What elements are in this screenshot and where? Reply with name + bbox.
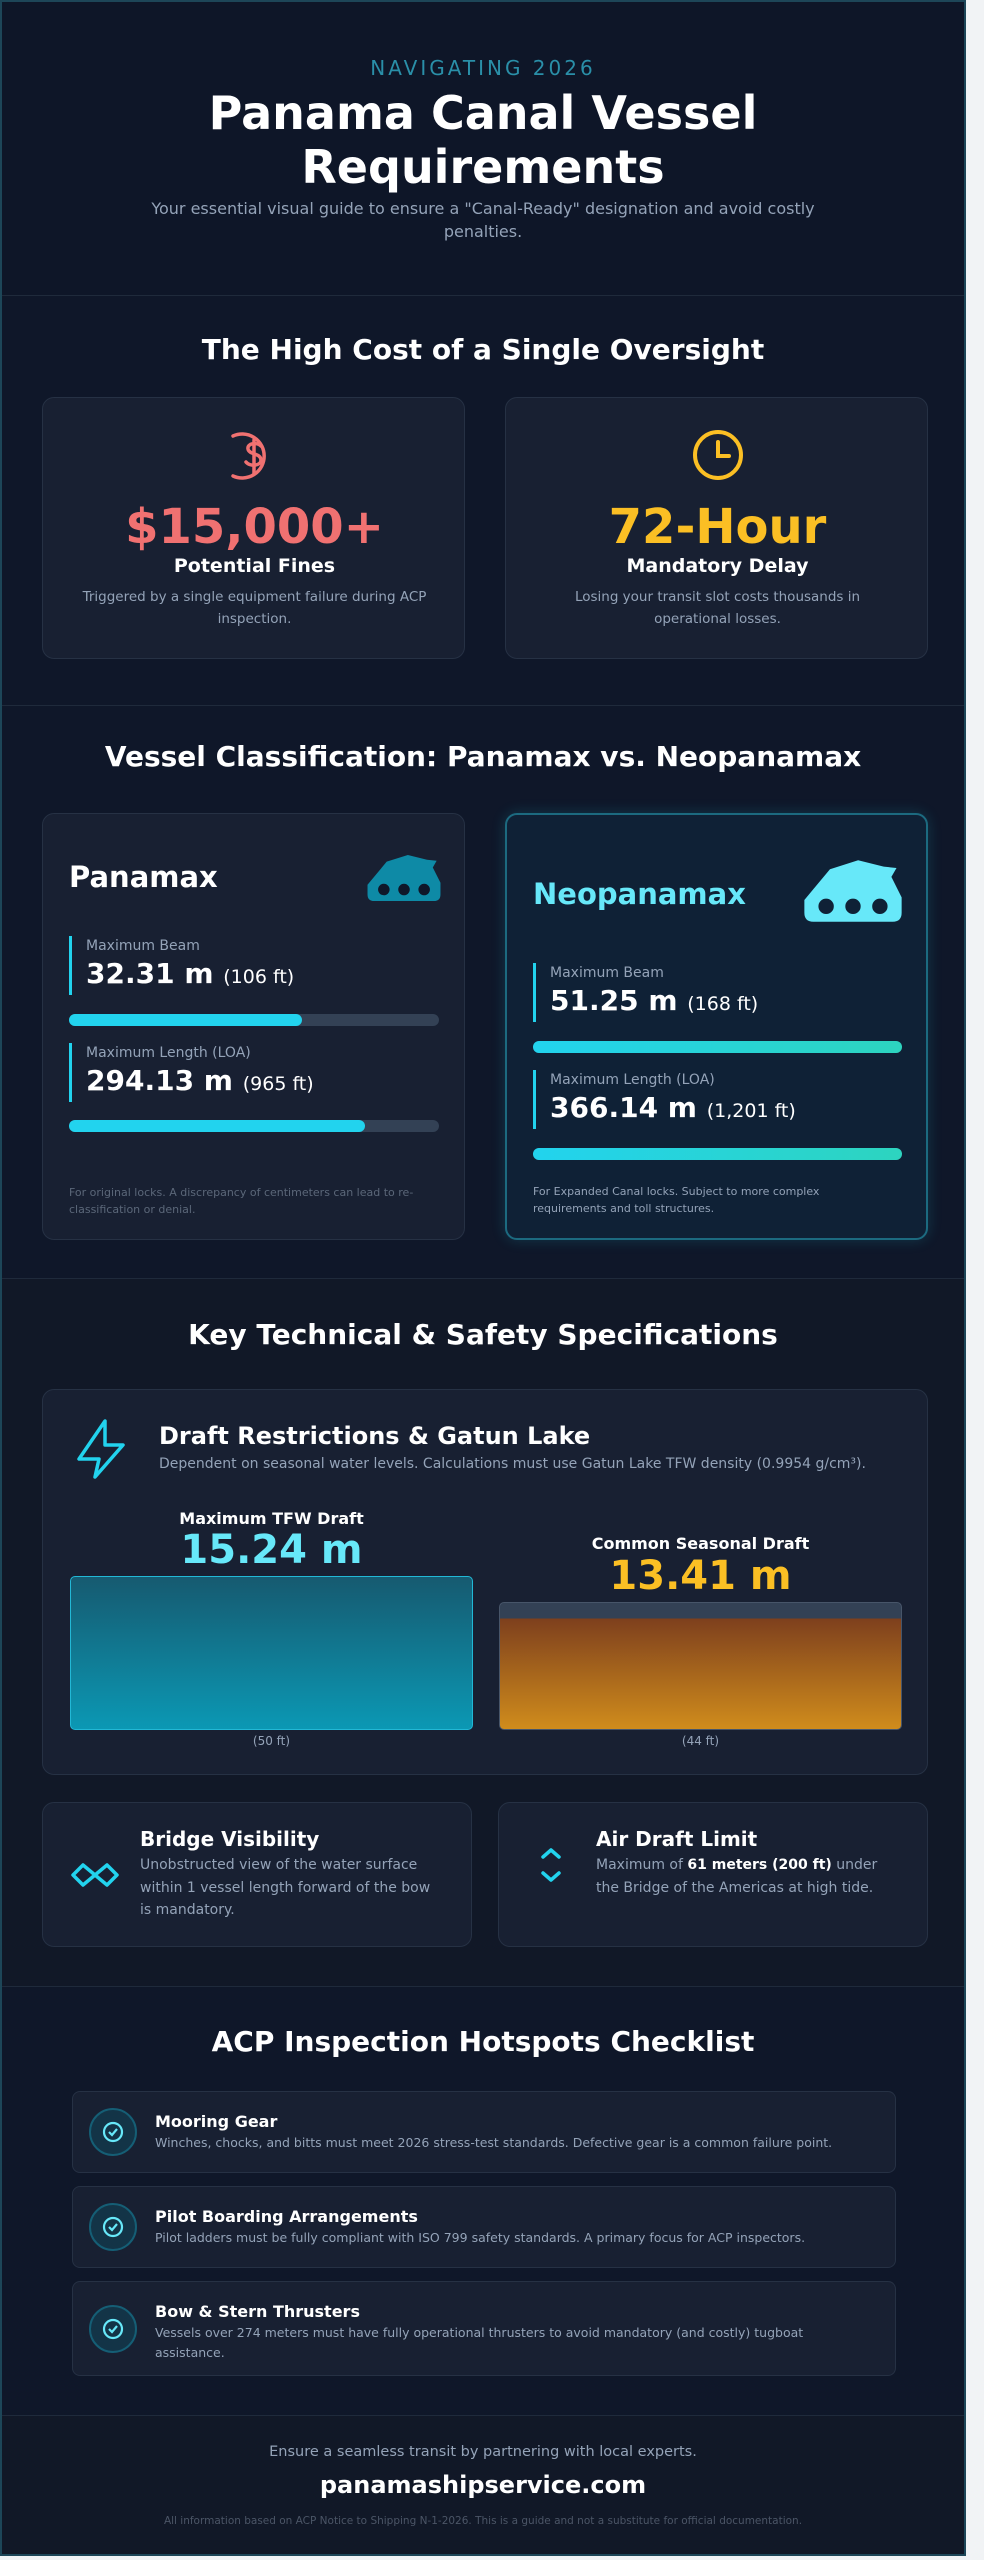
desc: Losing your transit slot costs thousands in operational losses.: [575, 589, 860, 627]
stat: beam: Maximum Beam: [86, 938, 200, 954]
bar: beam: [69, 1014, 439, 1026]
stat: beam: [69, 936, 294, 995]
icon: lightning: [77, 1419, 125, 1479]
desc: Triggered by a single equipment failure during ACP inspection.: [83, 589, 426, 627]
heading: Key Technical & Safety Specifications: [188, 1318, 778, 1351]
card: neopanamax: [505, 813, 928, 1240]
chart: seasonal draft: Common Seasonal Draft: [592, 1534, 809, 1553]
stat: length: 366.14 m (1,201 ft): [550, 1091, 796, 1124]
footnote: For original locks. A discrepancy of centimeters can lead to re-classification or denial.: [69, 1186, 413, 1216]
bar: length: [533, 1148, 902, 1160]
item: mooring: Mooring Gear: [155, 2112, 277, 2131]
stat: length: Maximum Length (LOA): [86, 1045, 251, 1061]
footnote: For Expanded Canal locks. Subject to more complex requirements and toll structures.: [533, 1185, 819, 1215]
body: Unobstructed view of the water surface within 1 vessel length forward of the bow is mandatory.: [140, 1857, 430, 1918]
item: thrusters: Vessels over 274 meters must have fully operational thrusters to avoid mandatory (and costly) tugboat assistance.: [155, 2325, 803, 2360]
icon: infinity: [71, 1863, 119, 1887]
item: thrusters: Bow & Stern Thrusters: [155, 2302, 360, 2321]
card: air draft: [498, 1802, 928, 1947]
chart: max draft: (50 ft): [253, 1734, 290, 1748]
item: pilot: Pilot Boarding Arrangements: [155, 2207, 418, 2226]
section: classification: [2, 705, 964, 1278]
stat: length: Maximum Length (LOA): [550, 1072, 715, 1088]
bar: length: [69, 1120, 439, 1132]
subtitle: Your essential visual guide to ensure a "Canal-Ready" designation and avoid costly penalties.: [151, 199, 815, 241]
value: $15,000+: [125, 499, 384, 555]
item: mooring: Winches, chocks, and bitts must meet 2026 stress-test standards. Defective gear is a common failure point.: [155, 2135, 832, 2150]
item: pilot: [72, 2186, 896, 2268]
icon: check: [89, 2108, 137, 2156]
card: bridge visibility: [42, 1802, 472, 1947]
chart: seasonal draft: 13.41 m: [609, 1553, 792, 1599]
body: Maximum of 61 meters (200 ft) under the Bridge of the Americas at high tide.: [596, 1857, 877, 1896]
disclaimer: All information based on ACP Notice to Shipping N-1-2026. This is a guide and not a substitute for official documentation.: [164, 2515, 802, 2527]
header section: [2, 2, 964, 295]
stat: beam: [533, 963, 758, 1022]
footer: [2, 2415, 964, 2560]
stat: beam: Maximum Beam: [550, 965, 664, 981]
heading: Vessel Classification: Panamax vs. Neopanamax: [105, 740, 861, 773]
chart: max draft: Maximum TFW Draft: [179, 1509, 364, 1528]
tagline: Ensure a seamless transit by partnering with local experts.: [269, 2444, 697, 2460]
section: checklist: [2, 1986, 964, 2415]
subtitle: Dependent on seasonal water levels. Calculations must use Gatun Lake TFW density (0.9954 g/cm³).: [159, 1456, 866, 1472]
title: Requirements: [301, 140, 665, 194]
name: Neopanamax: [533, 877, 746, 911]
section: high cost: [2, 295, 964, 705]
title: Draft Restrictions & Gatun Lake: [159, 1422, 590, 1450]
icon: dollar: [231, 432, 266, 480]
card: draft: [42, 1389, 928, 1775]
item: pilot: Pilot ladders must be fully compliant with ISO 799 safety standards. A primary focus for ACP inspectors.: [155, 2230, 805, 2245]
label: Mandatory Delay: [626, 555, 808, 577]
stat: length: [533, 1070, 796, 1129]
icon: ship: [804, 860, 902, 922]
icon: up-down chevrons: [541, 1848, 561, 1882]
eyebrow: NAVIGATING 2026: [370, 56, 596, 80]
label: Potential Fines: [174, 555, 335, 577]
chart: max draft: [70, 1509, 473, 1748]
bar: beam: [533, 1041, 902, 1053]
stat: beam: 51.25 m (168 ft): [550, 984, 758, 1017]
chart: seasonal draft: (44 ft): [682, 1734, 719, 1748]
chart: max draft: 15.24 m: [180, 1527, 363, 1573]
stat: length: 294.13 m (965 ft): [86, 1064, 314, 1097]
section: technical specs: [2, 1278, 964, 1986]
icon: clock: [693, 430, 743, 480]
title: Panama Canal Vessel: [209, 86, 757, 140]
item: thrusters: [72, 2281, 896, 2376]
heading: The High Cost of a Single Oversight: [202, 333, 764, 366]
icon: ship: [368, 855, 440, 901]
icon: check: [89, 2203, 137, 2251]
website: panamashipservice.com: [320, 2471, 646, 2499]
title: [209, 86, 757, 194]
chart: seasonal draft: [499, 1534, 902, 1748]
card: delay: [505, 397, 928, 659]
card: panamax: [42, 813, 465, 1240]
title: Bridge Visibility: [140, 1827, 319, 1851]
icon: check: [89, 2305, 137, 2353]
stat: beam: 32.31 m (106 ft): [86, 957, 294, 990]
title: Air Draft Limit: [596, 1827, 757, 1851]
heading: ACP Inspection Hotspots Checklist: [212, 2025, 754, 2058]
name: Panamax: [69, 860, 218, 894]
value: 72-Hour: [609, 499, 826, 555]
stat: length: [69, 1043, 314, 1102]
item: mooring: [72, 2091, 896, 2173]
card: fines: [42, 397, 465, 659]
